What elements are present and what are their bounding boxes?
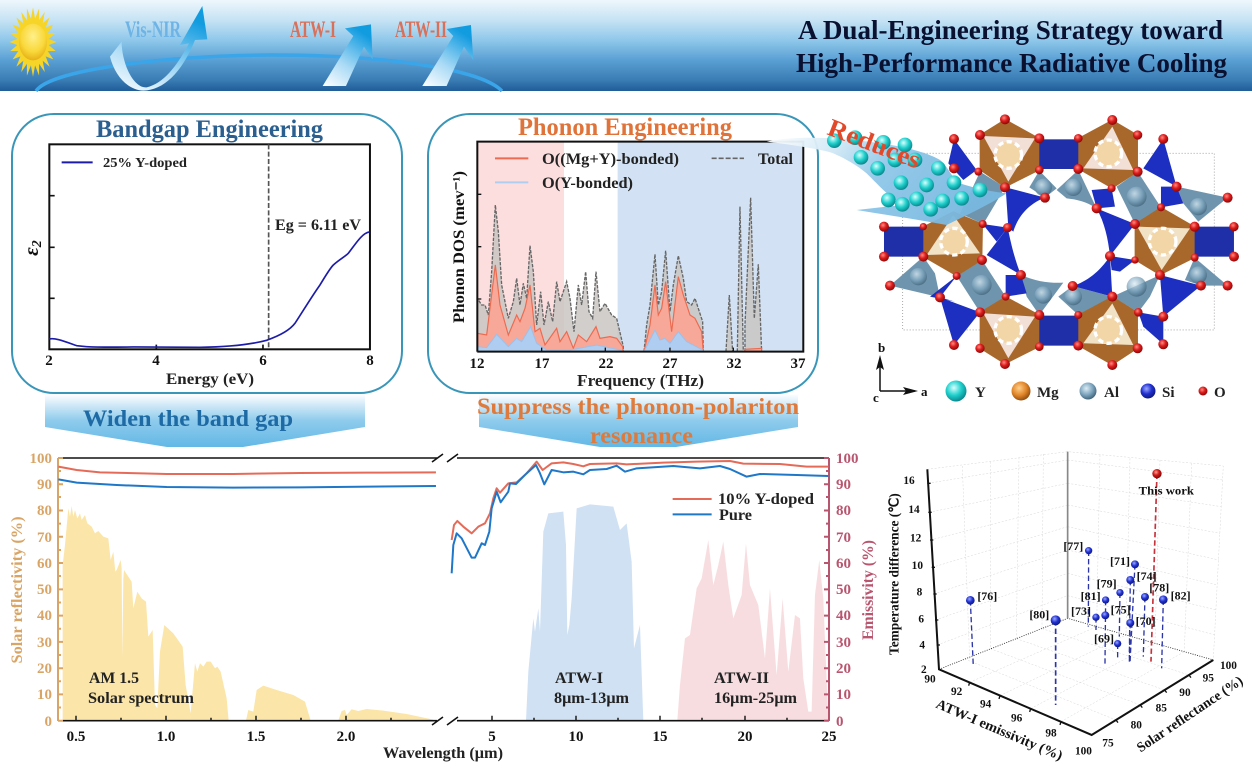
right axis numbers: 20 [836, 661, 851, 677]
chart: phonon density of states [451, 142, 806, 390]
title [796, 15, 1227, 78]
axis titles: ATW-I emissivity (%) [933, 697, 1065, 764]
panel: bandgap engineering [12, 114, 402, 393]
curves right segment [452, 461, 828, 573]
header banner [0, 0, 1252, 91]
chart: epsilon2 versus energy: 4 [152, 353, 160, 369]
icon: sun [9, 7, 57, 77]
legend: atom species: Si [1162, 385, 1175, 401]
curves left segment [58, 467, 436, 488]
chart: epsilon2 versus energy: ε [19, 247, 43, 256]
atmospheric window II area [677, 540, 828, 721]
axis numbers: 2 [921, 664, 927, 676]
point labels: [80] [1029, 607, 1049, 621]
x axis numbers: 0.5 [67, 729, 85, 745]
chart: phonon density of states: Phonon DOS (mev⁻¹) [451, 171, 468, 323]
callout arrow: suppress the phonon-polariton resonance: Suppress the phonon-polariton [477, 394, 799, 420]
data points blue [966, 547, 1168, 647]
chart: epsilon2 versus energy: Energy (eV) [166, 371, 254, 388]
right axis numbers: 90 [836, 477, 851, 493]
horizon arc [36, 55, 502, 91]
point labels [977, 483, 1194, 646]
axis titles: Solar reflectance (%) [1134, 674, 1246, 756]
left axis numbers: 70 [37, 530, 52, 546]
axis numbers: 100 [1220, 660, 1237, 672]
heading: Bandgap Engineering: Bandgap Engineering [96, 116, 323, 143]
yttrium-magnesium polyhedra [923, 119, 1195, 365]
axis numbers: 96 [1011, 713, 1023, 725]
drop lines [970, 474, 1163, 705]
left axis numbers: 90 [37, 477, 52, 493]
chart: epsilon2 versus energy [19, 144, 374, 388]
legend: atom species: Y [975, 385, 986, 401]
chart: phonon density of states: Frequency (THz) [577, 371, 704, 390]
crystal axes: b [878, 340, 885, 355]
right axis numbers: 100 [836, 451, 858, 467]
arrow: ATW-II emission [422, 25, 473, 86]
chart: phonon density of states: 22 [598, 356, 614, 372]
aluminium tetrahedra [890, 170, 1228, 315]
point labels: [79] [1097, 576, 1117, 590]
axis numbers: 90 [924, 674, 936, 686]
axis numbers: 92 [951, 686, 963, 698]
chart: phonon density of states: 17 [534, 356, 550, 372]
crystal axes: a [921, 384, 928, 399]
arrow: ATW-I emission [323, 24, 373, 86]
right axis numbers: 50 [836, 582, 851, 598]
right axis numbers [836, 451, 858, 730]
chart: epsilon2 versus energy: 6 [259, 353, 267, 369]
point labels: This work [1139, 483, 1194, 497]
chart: epsilon2 versus energy: Eg = 6.11 eV [275, 217, 362, 234]
oxygen atoms [879, 114, 1239, 370]
x axis numbers: 5 [488, 729, 496, 745]
callout arrow: widen the band gap [45, 394, 365, 447]
chart: epsilon2 versus energy: 2 [45, 353, 53, 369]
right axis numbers: 60 [836, 556, 851, 572]
dark silicon faces [884, 139, 1234, 346]
annotations: 8μm-13μm [554, 690, 630, 707]
callout arrow: widen the band gap: Widen the band gap [83, 406, 293, 432]
chart: 3D comparison scatter [887, 452, 1246, 764]
annotations [88, 491, 814, 707]
point labels: [81] [1081, 589, 1101, 603]
crystal axes: c [873, 390, 879, 405]
x axis numbers: 2.0 [337, 729, 355, 745]
point labels: [76] [977, 589, 997, 603]
arrow: Vis-NIR reflected swoosh [110, 6, 207, 91]
annotations: 10% Y-doped [718, 491, 814, 508]
legend: atom species: Al [1104, 385, 1119, 401]
x axis numbers: 25 [822, 729, 836, 745]
point labels: [82] [1171, 588, 1191, 602]
chart: phonon density of states: Total [758, 151, 794, 168]
x axis numbers: 15 [652, 729, 668, 745]
data point: this work [1152, 469, 1162, 478]
chart: epsilon2 versus energy: 25% Y-doped [103, 156, 187, 171]
point labels: [70] [1136, 614, 1156, 628]
legend: atom species [946, 380, 1226, 402]
point labels: [77] [1063, 539, 1083, 553]
left axis numbers: 40 [37, 608, 52, 624]
chart: phonon density of states: 12 [470, 356, 484, 372]
label: Vis-NIR: Vis-NIR [125, 17, 181, 42]
annotations: ATW-II [714, 670, 769, 687]
right axis numbers: 70 [836, 530, 851, 546]
left axis numbers: 50 [37, 582, 52, 598]
annotations: Solar spectrum [88, 690, 195, 707]
axis numbers: 100 [1075, 745, 1092, 757]
axis numbers: 4 [919, 639, 925, 651]
panel: phonon engineering [428, 114, 818, 393]
axes frame [58, 454, 829, 725]
callout arrow: suppress the phonon-polariton resonance [477, 394, 799, 449]
yttrium atoms [827, 130, 987, 217]
left axis numbers: 10 [37, 687, 52, 703]
left axis numbers: 60 [37, 556, 52, 572]
label: Reduces: Reduces [824, 114, 924, 174]
axis numbers: 8 [917, 587, 923, 599]
annotations: AM 1.5 [89, 670, 139, 687]
point labels: [73] [1071, 604, 1091, 618]
left axis numbers [30, 451, 52, 730]
annotations: 16μm-25μm [714, 690, 798, 707]
chart: phonon density of states: 37 [790, 356, 806, 372]
callout arrow: suppress the phonon-polariton resonance: resonance [590, 423, 693, 449]
point labels: [71] [1110, 554, 1130, 568]
left axis numbers: 80 [37, 503, 52, 519]
axis numbers: 98 [1045, 728, 1057, 740]
axis numbers: 75 [1102, 738, 1114, 750]
crystal axes [873, 340, 928, 405]
right axis numbers: 40 [836, 608, 851, 624]
annotations: Pure [719, 507, 752, 524]
axis titles: Temperature difference (℃) [887, 493, 902, 655]
axis numbers [903, 475, 1237, 757]
right axis numbers: 80 [836, 503, 851, 519]
axis numbers: 90 [1179, 687, 1191, 699]
axis numbers: 95 [1203, 673, 1214, 685]
chart: solar reflectivity and emissivity spectrum: Wavelength (μm) [383, 745, 503, 762]
axis numbers: 85 [1156, 703, 1167, 715]
chart: epsilon2 versus energy: 8 [366, 353, 374, 369]
point labels: [75] [1111, 602, 1131, 616]
label: ATW-II: ATW-II [395, 17, 447, 42]
axis numbers: 10 [912, 560, 923, 572]
x axis numbers: 10 [568, 729, 584, 745]
axis numbers: 12 [910, 532, 922, 544]
chart: phonon density of states: O(Y-bonded) [542, 175, 633, 192]
silicon tetrahedra [930, 139, 1201, 345]
right axis numbers: 30 [836, 635, 851, 651]
point labels: [74] [1137, 569, 1157, 583]
label: ATW-I: ATW-I [290, 17, 336, 42]
chart: epsilon2 versus energy: 2 [30, 240, 45, 248]
x axis numbers: 1.5 [247, 729, 265, 745]
x axis numbers: 20 [738, 729, 752, 745]
title: High-Performance Radiative Cooling [796, 48, 1227, 78]
legend: atom species: O [1214, 385, 1226, 401]
right axis numbers: 0 [836, 714, 844, 730]
crystal structure [879, 114, 1239, 370]
arrow wedge: yttrium reducing the band [767, 138, 1007, 225]
legend: atom species: Mg [1037, 385, 1059, 401]
left axis numbers: 0 [44, 714, 52, 730]
axis numbers: 14 [908, 504, 920, 516]
axis numbers: 80 [1131, 719, 1142, 731]
chart: phonon density of states: 32 [726, 356, 742, 372]
axis titles [887, 493, 1246, 764]
left axis numbers: 20 [37, 661, 52, 677]
annotations: ATW-I [555, 670, 603, 687]
point labels: [78] [1149, 581, 1169, 595]
title: A Dual-Engineering Strategy toward [798, 15, 1223, 45]
x axis numbers: 1.0 [157, 729, 175, 745]
atmospheric window I area [526, 504, 643, 721]
axis numbers: 94 [980, 698, 992, 710]
axis numbers: 16 [903, 475, 915, 487]
right axis numbers: 10 [836, 687, 851, 703]
heading: Phonon Engineering: Phonon Engineering [518, 114, 732, 141]
x axis numbers [67, 729, 836, 745]
chart: phonon density of states: O((Mg+Y)-bonded) [542, 151, 679, 168]
grid [927, 452, 1223, 722]
chart: solar reflectivity and emissivity spectrum [9, 451, 877, 762]
solar spectrum area [63, 506, 433, 721]
chart: phonon density of states: 27 [662, 356, 678, 372]
left axis numbers: 100 [30, 451, 52, 467]
axis numbers: 6 [918, 613, 924, 625]
axis titles: Solar reflectivity (%) [9, 517, 26, 663]
point labels: [69] [1094, 632, 1114, 646]
aluminium atoms [910, 179, 1207, 305]
left axis numbers: 30 [37, 635, 52, 651]
chart: solar reflectivity and emissivity spectrum: Emissivity (%) [860, 540, 877, 640]
